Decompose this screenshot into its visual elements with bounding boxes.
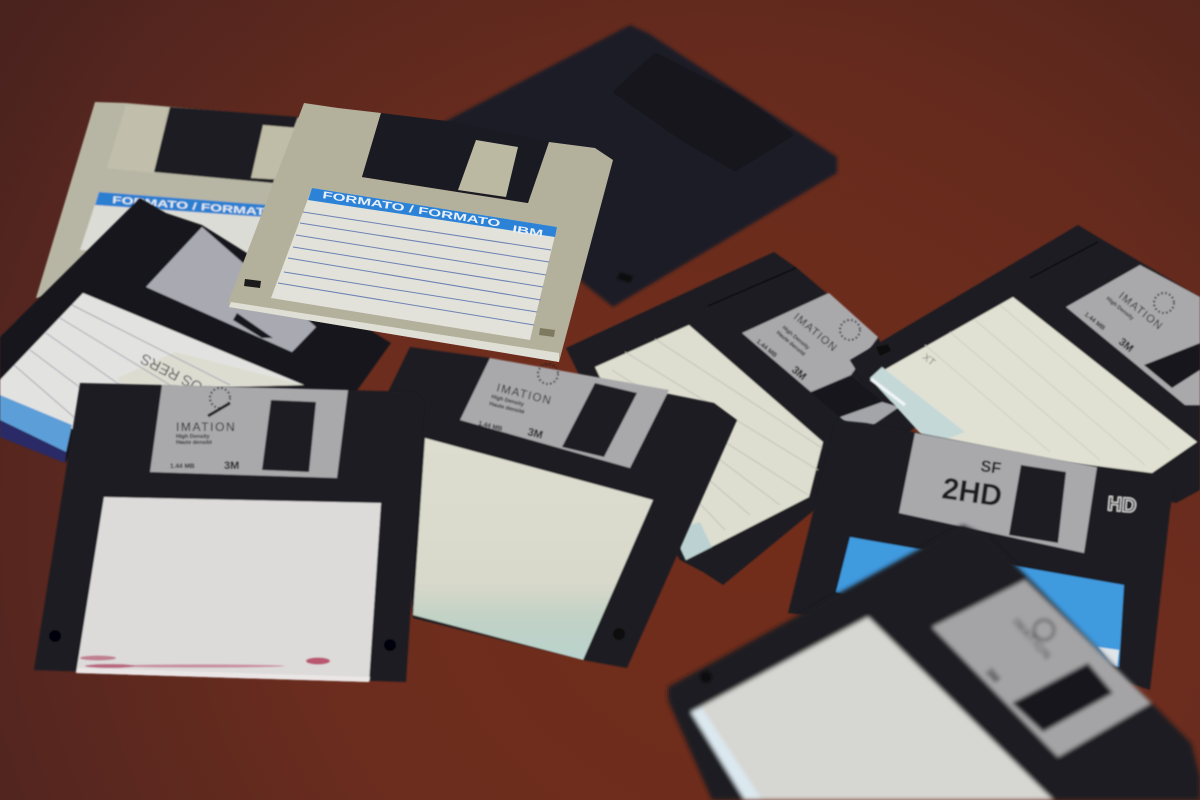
- metal shutter: [899, 433, 1097, 553]
- metal shutter: High Density: [1105, 296, 1135, 322]
- metal shutter: High Density: [176, 434, 211, 440]
- notch holes: [244, 279, 261, 288]
- metal shutter: [146, 227, 316, 352]
- write-protect hole: [876, 344, 891, 356]
- disk: black disk with silver shutter, left: [0, 198, 391, 463]
- metal shutter: [742, 293, 899, 427]
- metal shutter: IMATION: [495, 382, 553, 408]
- label: FOS RERS: [138, 350, 214, 400]
- metal shutter: 1.44 MB: [755, 338, 778, 360]
- disk: bottom-right disk: [668, 525, 1200, 800]
- label: [76, 497, 381, 682]
- write-protect window: [362, 113, 549, 203]
- label: [595, 325, 823, 560]
- metal shutter: Haute densité: [775, 330, 806, 358]
- metal shutter: Haute densité: [176, 440, 212, 446]
- HD logo: HD: [1107, 493, 1137, 517]
- metal shutter: IMATION: [1116, 290, 1165, 333]
- blue label: [836, 537, 1124, 667]
- metal shutter: 3M: [1116, 336, 1136, 355]
- disk: beige back disk: [36, 102, 300, 298]
- metal shutter: 3M: [224, 460, 239, 472]
- disk: black back disk: [440, 25, 837, 307]
- metal shutter: IMATION: [176, 420, 236, 434]
- disk: black right disk with IMATION shutter: [850, 225, 1200, 503]
- metal shutter: 2HD: [940, 472, 1004, 513]
- metal shutter: Haute densité: [489, 401, 525, 416]
- metal shutter slot: [458, 140, 518, 197]
- label: IBM: [512, 224, 544, 240]
- metal shutter: [1066, 265, 1200, 405]
- metal shutter: 3M: [789, 364, 808, 383]
- metal shutter: 3M: [983, 666, 1002, 685]
- metal shutter: IMATION: [1010, 616, 1053, 663]
- disk: black right disk with IMATION shutter: XT: [920, 352, 937, 369]
- metal shutter: 1.44 MB: [478, 420, 503, 433]
- metal shutter: [460, 358, 669, 468]
- label: [271, 188, 557, 340]
- disk: black center disk: [388, 347, 737, 668]
- label: [870, 297, 1197, 473]
- metal shutter: SF: [979, 458, 1002, 478]
- disk: beige back disk: FORMATO / FORMATO: [112, 195, 277, 219]
- metal shutter: [932, 580, 1151, 757]
- metal shutter: 1.44 MB: [170, 463, 195, 470]
- disk: black left-front disk: [34, 383, 424, 682]
- disk: black middle-right disk: [566, 252, 918, 585]
- disk: beige front disk: [229, 103, 613, 362]
- label: [691, 617, 1053, 800]
- hub holes: [49, 630, 61, 642]
- label: [0, 293, 304, 463]
- metal shutter: High Density: [781, 325, 811, 352]
- metal shutter: High Density: [491, 394, 525, 408]
- metal shutter: 1.44 MB: [1083, 311, 1106, 332]
- metal shutter: [150, 385, 348, 478]
- disk: HD disk with blue label: [788, 420, 1174, 690]
- metal shutter: 3M: [526, 426, 544, 442]
- label: FORMATO / FORMATO: [322, 190, 501, 230]
- hub hole: [700, 671, 712, 683]
- hub hole: [613, 628, 625, 640]
- label: [413, 438, 653, 660]
- metal shutter: IMATION: [791, 311, 840, 355]
